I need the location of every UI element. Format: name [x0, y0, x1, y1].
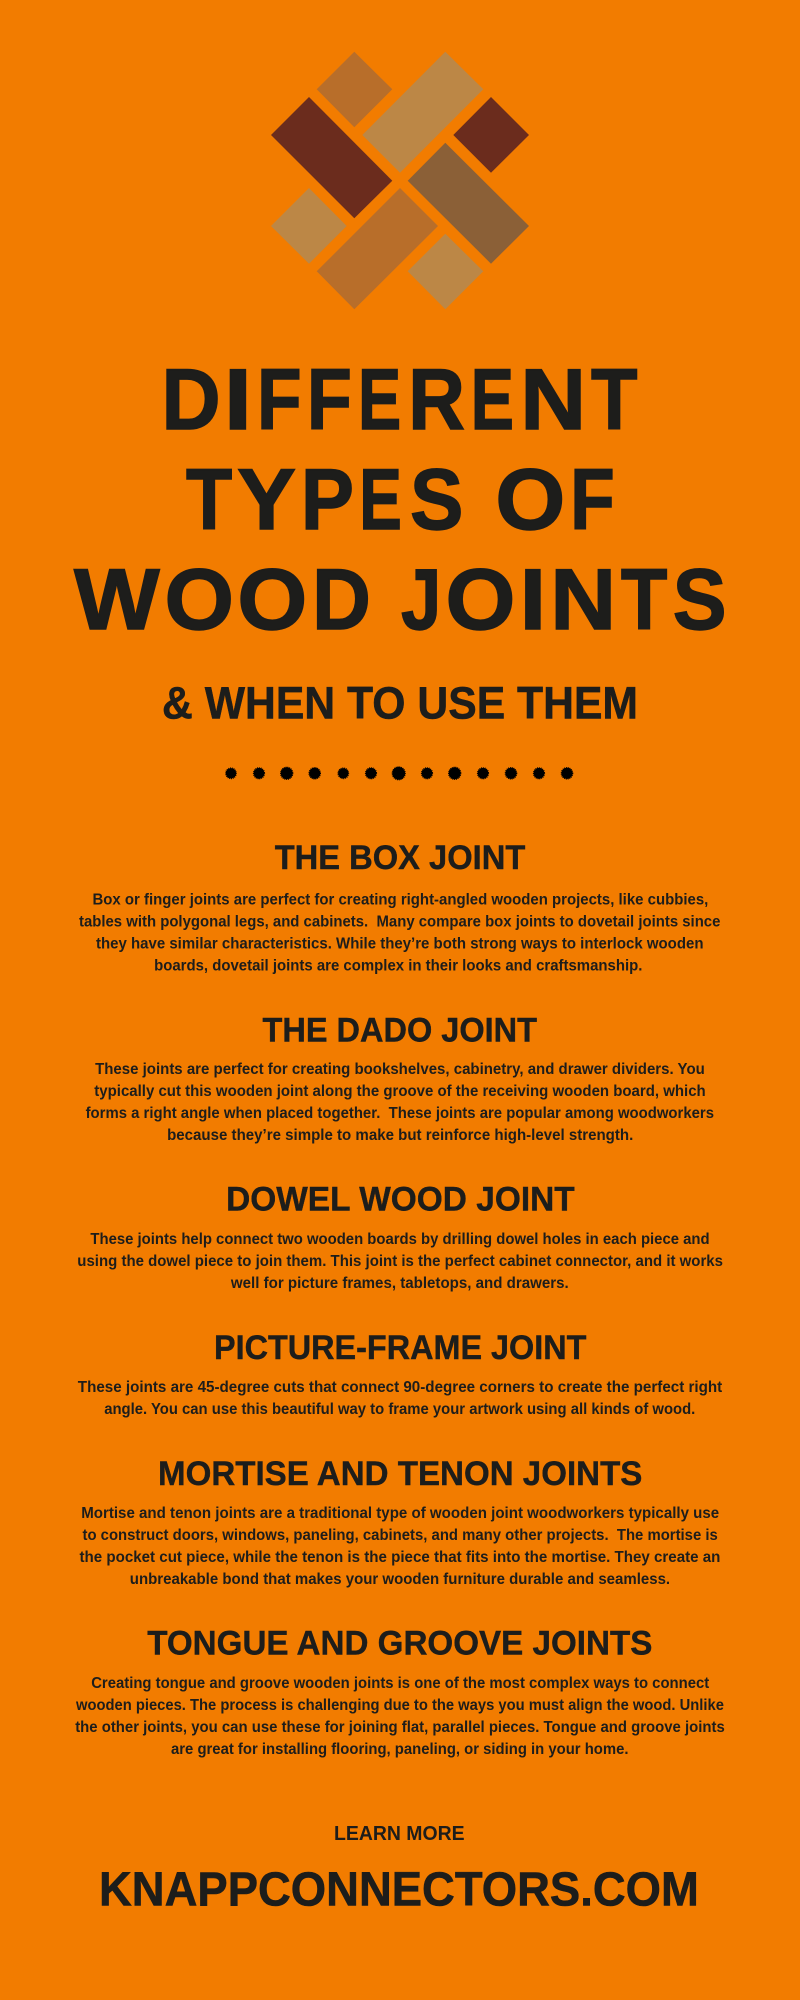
text: box joint description: boards, dovetail joints are complex in their looks and craftsmanship.: [154, 957, 642, 974]
title: F: [257, 352, 302, 448]
title: D: [162, 352, 221, 448]
text: dowel joint description: well for picture frames, tabletops, and drawers.: [230, 1275, 569, 1292]
title: Y: [237, 452, 296, 548]
heading: tongue and groove joints: TONGUE AND GROOVE JOINTS: [147, 1625, 652, 1663]
heading: mortise and tenon joints: MORTISE AND TENON JOINTS: [158, 1455, 642, 1493]
title: E: [359, 452, 402, 548]
title: T: [186, 452, 232, 548]
title: O: [446, 552, 515, 648]
panel: the dado joint: [86, 1012, 714, 1144]
panel: picture-frame joint: [78, 1329, 722, 1418]
title: I: [519, 552, 546, 648]
text: dowel joint description: using the dowel piece to join them. This joint is the perfect cabinet connector, and it works: [77, 1253, 723, 1270]
heading: the dado joint: THE DADO JOINT: [262, 1012, 537, 1050]
text: mortise and tenon description: the pocket cut piece, while the tenon is the piece that fits into the mortise. They create an: [80, 1549, 720, 1566]
heading: dowel wood joint: DOWEL WOOD JOINT: [226, 1181, 575, 1219]
panel: the box joint: [79, 839, 721, 974]
text: dowel joint description: [77, 1231, 723, 1292]
text: mortise and tenon description: to construct doors, windows, paneling, cabinets, and many other projects. The mortise is: [82, 1527, 718, 1544]
title: S: [410, 452, 463, 548]
call to action: [99, 1823, 699, 1916]
dotted divider: [226, 767, 573, 780]
text: tongue and groove description: the other joints, you can use these for joining flat, parallel pieces. Tongue and groove joints: [75, 1719, 725, 1736]
text: tongue and groove description: wooden pieces. The process is challenging due to the ways you must align the wood. Unlike: [75, 1697, 724, 1714]
title: T: [591, 352, 638, 448]
title: D: [312, 552, 371, 648]
title: T: [621, 552, 667, 648]
text: mortise and tenon description: Mortise and tenon joints are a traditional type of wooden joint woodworkers typically use: [81, 1505, 720, 1522]
text: dowel joint description: These joints help connect two wooden boards by drilling dowel holes in each piece and: [90, 1231, 710, 1248]
text: mortise and tenon description: [80, 1505, 720, 1588]
text: box joint description: Box or finger joints are perfect for creating right-angled wooden projects, like cubbies,: [92, 891, 708, 908]
text: tongue and groove description: Creating tongue and groove wooden joints is one of the most complex ways to connect: [91, 1675, 709, 1692]
panel: mortise and tenon joints: [80, 1455, 720, 1588]
text: mortise and tenon description: unbreakable bond that makes your wooden furniture durable and seamless.: [130, 1571, 670, 1588]
title: F: [570, 452, 615, 548]
title: I: [224, 352, 252, 448]
text: box joint description: [79, 891, 721, 974]
title: P: [301, 452, 354, 548]
title: F: [307, 352, 352, 448]
title: E: [471, 352, 514, 448]
text: dado joint description: typically cut this wooden joint along the groove of the receiving wooden board, which: [94, 1083, 706, 1100]
text: picture-frame joint description: [78, 1379, 722, 1418]
subtitle: & WHEN TO USE THEM: [162, 677, 638, 728]
label: learn more: LEARN MORE: [334, 1823, 465, 1845]
text: dado joint description: forms a right angle when placed together. These joints are popular among woodworkers: [86, 1105, 714, 1122]
title: O: [237, 552, 307, 648]
title: N: [550, 552, 616, 648]
title: W: [74, 552, 161, 648]
title: E: [358, 352, 401, 448]
title: N: [520, 352, 586, 448]
title: O: [495, 452, 565, 548]
text: dado joint description: because they’re simple to make but reinforce high-level strength.: [167, 1127, 633, 1144]
panel: tongue and groove joints: [75, 1625, 725, 1758]
icon: interlocking wood planks logo: [271, 52, 529, 309]
text: tongue and groove description: are great for installing flooring, paneling, or siding in your home.: [171, 1741, 628, 1758]
heading: the box joint: THE BOX JOINT: [275, 839, 526, 877]
text: dado joint description: [86, 1061, 714, 1144]
text: dado joint description: These joints are perfect for creating bookshelves, cabinetry, and drawer dividers. You: [95, 1061, 705, 1078]
title: O: [164, 552, 234, 648]
title: J: [401, 552, 441, 648]
text: tongue and groove description: [75, 1675, 725, 1758]
text: picture-frame joint description: angle. You can use this beautiful way to frame your artwork using all kinds of wood.: [104, 1401, 695, 1418]
text: picture-frame joint description: These joints are 45-degree cuts that connect 90-degree corners to create the perfect right: [78, 1379, 722, 1396]
panel: dowel wood joint: [77, 1181, 723, 1292]
title: S: [673, 552, 727, 648]
title: R: [408, 352, 465, 448]
title: [74, 352, 727, 648]
heading: picture-frame joint: PICTURE-FRAME JOINT: [214, 1329, 587, 1367]
text: box joint description: tables with polygonal legs, and cabinets. Many compare box joints to dovetail joints since: [79, 913, 721, 930]
website url: KNAPPCONNECTORS.COM: [99, 1862, 699, 1916]
text: box joint description: they have similar characteristics. While they’re both strong ways to interlock wooden: [96, 935, 704, 952]
